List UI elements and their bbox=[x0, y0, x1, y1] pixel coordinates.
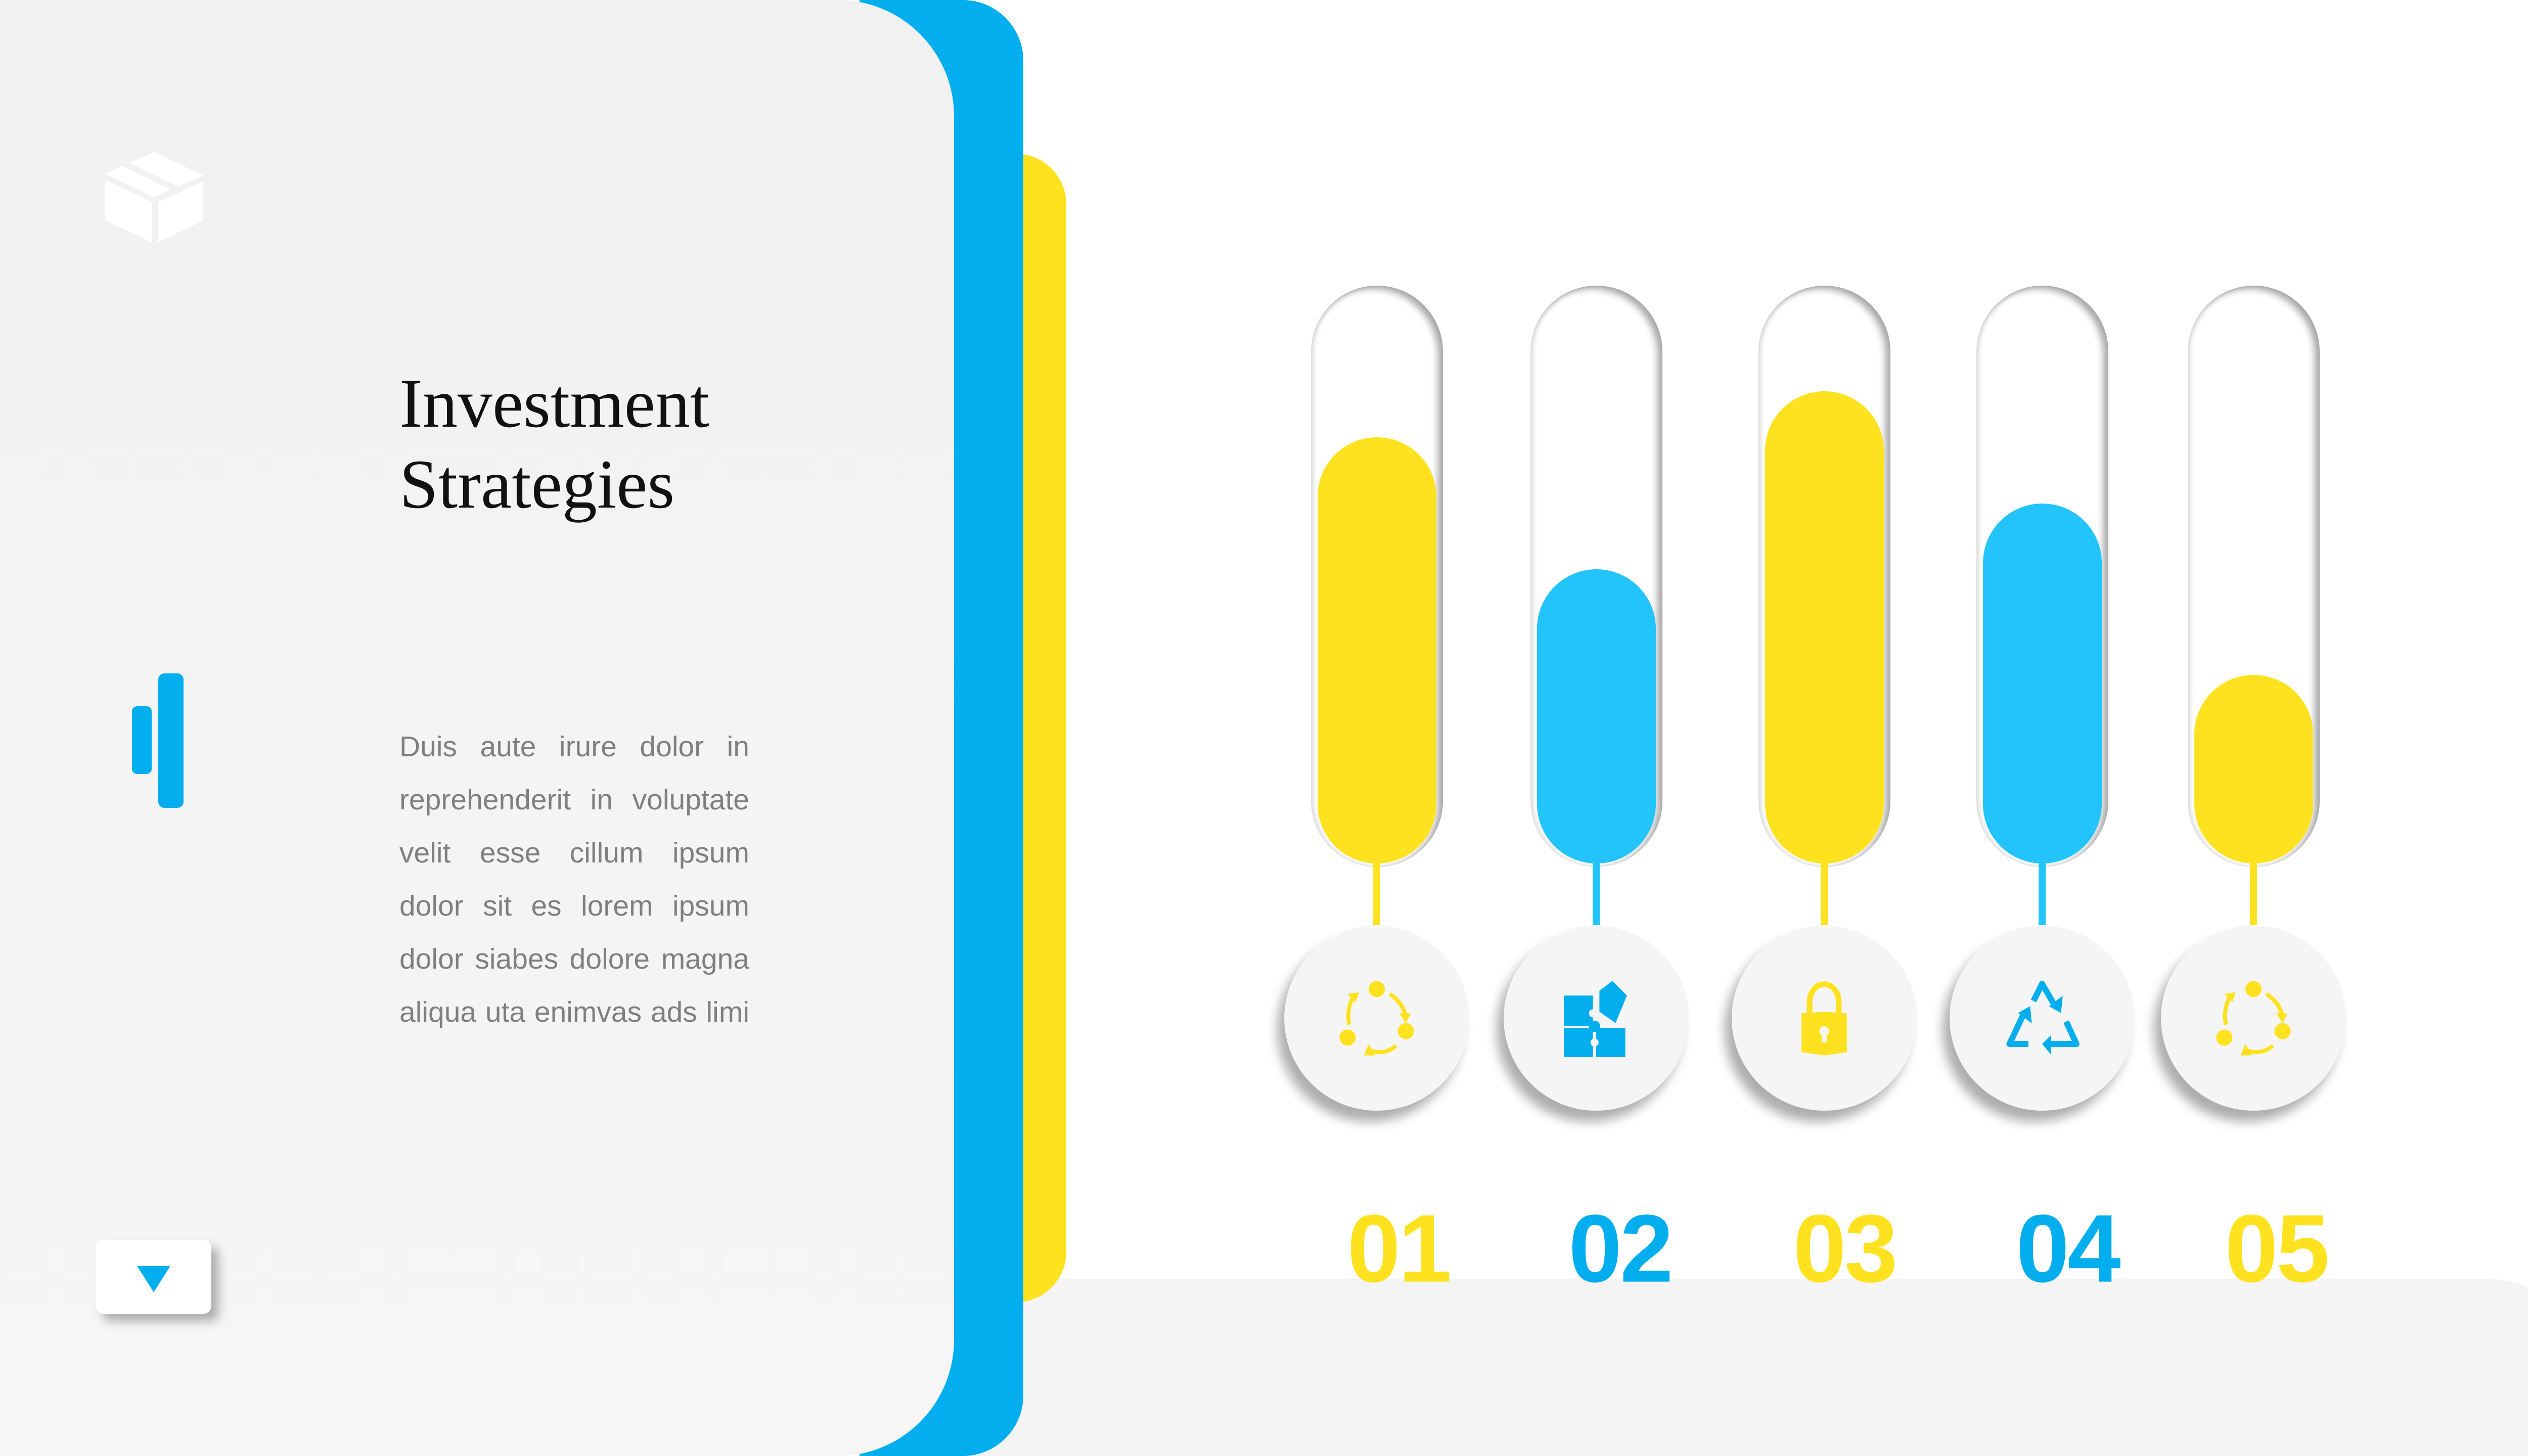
tube 04 bbox=[1976, 286, 2108, 867]
tube 03 bbox=[1758, 286, 1890, 867]
blue strip bbox=[860, 0, 1023, 1456]
title bbox=[399, 365, 709, 523]
tube 01 bbox=[1311, 286, 1443, 867]
numbers: 05 bbox=[2225, 1195, 2328, 1302]
tube 02 bbox=[1530, 286, 1662, 867]
tube 05 bbox=[2188, 286, 2320, 867]
numbers: 01 bbox=[1347, 1195, 1450, 1302]
bottom grey band bbox=[961, 1279, 2528, 1456]
circle 03: lock icon bbox=[1732, 926, 1917, 1111]
circle 01: cycle icon bbox=[1284, 926, 1469, 1111]
icon: bars bbox=[132, 673, 184, 808]
title: Strategies bbox=[399, 445, 674, 523]
button: down bbox=[96, 1240, 211, 1314]
left panel bbox=[0, 0, 954, 1456]
numbers: 02 bbox=[1568, 1195, 1672, 1302]
numbers: 03 bbox=[1793, 1195, 1896, 1302]
body text: Duis aute irure dolor in reprehenderit in voluptate velit esse cillum ipsum dolor sit es lorem ipsum dolor siabes dolore magna aliqua uta enimvas ads limi bbox=[399, 731, 749, 1028]
icon: box bbox=[105, 152, 203, 242]
connectors bbox=[1373, 863, 2257, 925]
numbers: 04 bbox=[2016, 1195, 2119, 1302]
circle 04: recycle icon bbox=[1950, 926, 2135, 1111]
title: Investment bbox=[399, 365, 709, 442]
circle 05: cycle icon bbox=[2161, 926, 2346, 1111]
numbers bbox=[1347, 1195, 2328, 1302]
circle 02: puzzle icon bbox=[1504, 926, 1689, 1111]
yellow strip bbox=[910, 154, 1066, 1302]
